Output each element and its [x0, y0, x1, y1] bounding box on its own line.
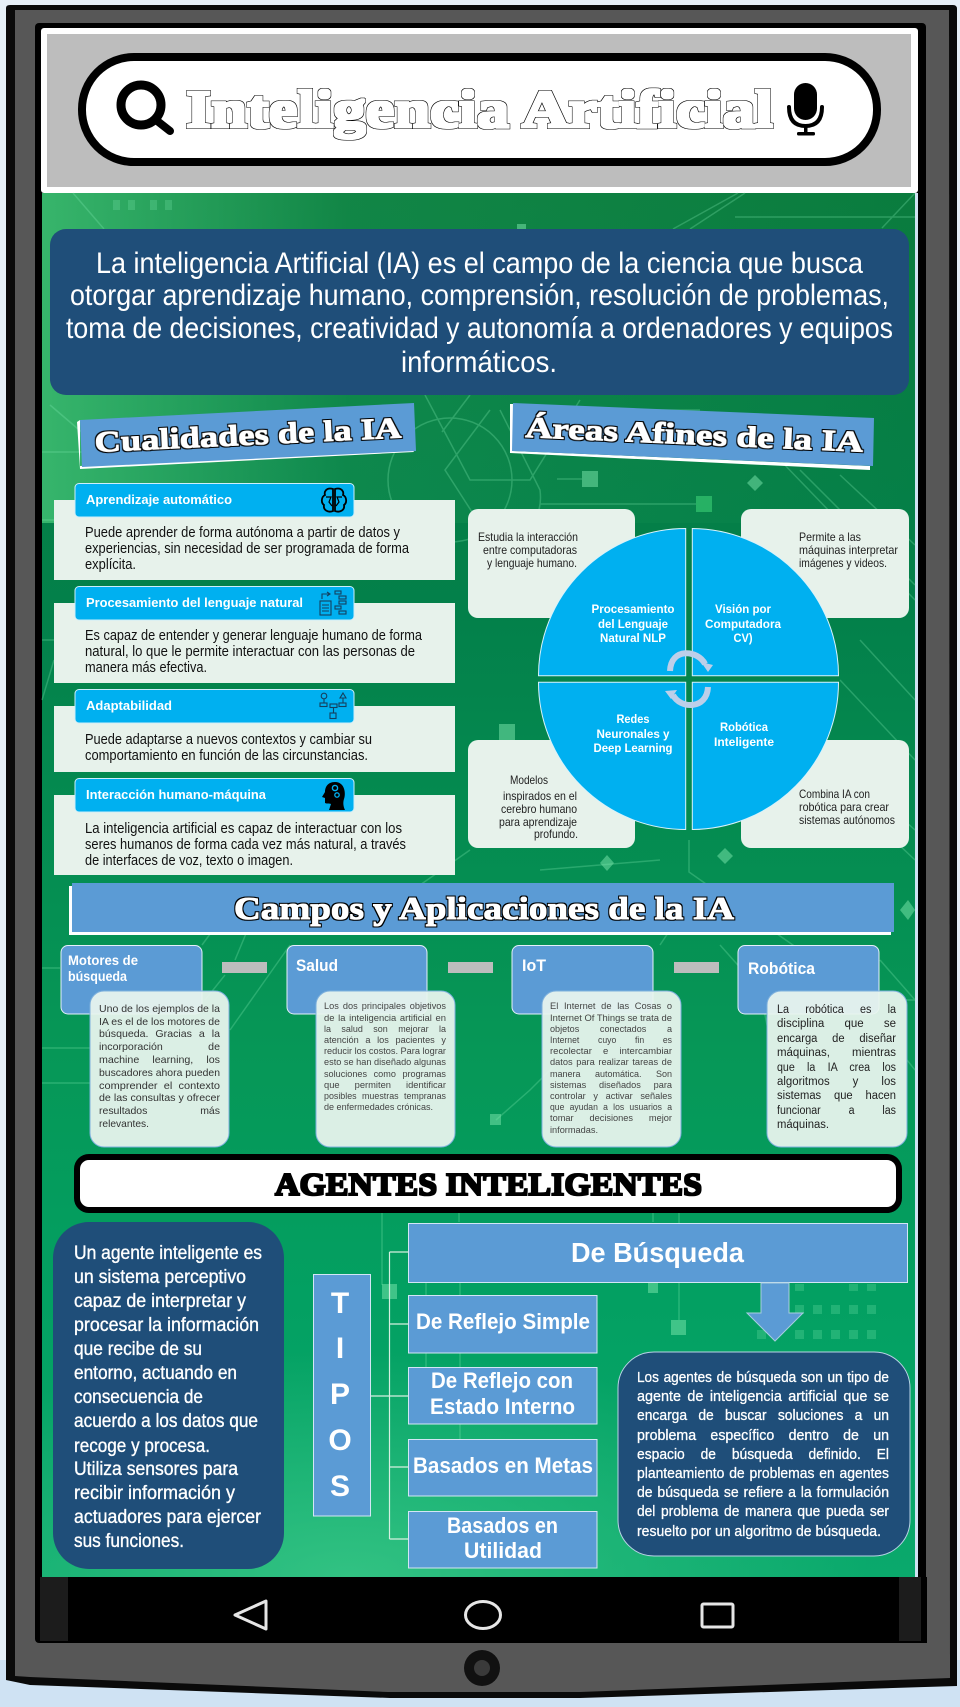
text block: agente inteligente: consecuencia de [74, 1387, 203, 1408]
type: De Búsqueda [408, 1224, 908, 1282]
text block: agentes de búsqueda [618, 1352, 910, 1556]
card: redes: Modelos [510, 773, 548, 787]
type: De Reflejo con Estado Interno [408, 1368, 597, 1424]
intro text block [50, 229, 909, 395]
type: De Reflejo Simple: De Reflejo Simple [416, 1309, 590, 1334]
panel: Motores de búsqueda: IA es el de los motores de [99, 1016, 220, 1028]
quadrant labels: Redes [616, 714, 650, 726]
panel: Aprendizaje automático [54, 484, 455, 580]
panel: IoT: objetos conectados a [550, 1024, 672, 1034]
panel: Salud: soluciones como programas [324, 1069, 446, 1079]
phone camera [464, 1650, 500, 1686]
panel: Motores de búsqueda: buscadores ahora pueden [99, 1067, 220, 1079]
icon: head with gears [322, 782, 345, 810]
panel: Adaptabilidad [54, 690, 455, 772]
card: NLP [468, 509, 635, 618]
card: visión: máquinas interpretar [799, 543, 898, 557]
text block: agente inteligente: Utiliza sensores para [74, 1459, 238, 1480]
icon: flow document [320, 591, 346, 615]
search bar [82, 57, 877, 162]
type: Basados en Utilidad: Basados en [447, 1513, 558, 1538]
text block: agentes de búsqueda: problema específico dentro de un [637, 1427, 889, 1444]
phone navigation bar [40, 1577, 927, 1643]
panel: Salud [287, 946, 455, 1147]
text block: agente inteligente: acuerdo a los datos que [74, 1411, 258, 1432]
intro text block: informáticos. [401, 346, 557, 379]
text block: agente inteligente: un sistema perceptivo [74, 1267, 246, 1288]
diagram: TIPOS: T [331, 1287, 349, 1320]
panel: Salud: la salud son mejorar la [324, 1024, 446, 1034]
icon: back [235, 1601, 266, 1629]
quadrant labels: Natural NLP [600, 633, 666, 645]
panel: Salud: esto se han diseñado algunas [324, 1057, 447, 1067]
icon: recent apps [702, 1604, 733, 1627]
tree connector lines [371, 1252, 408, 1539]
text block: agente inteligente: que recibe de su [74, 1339, 202, 1360]
panel: Salud: de la inteligencia artificial en [324, 1013, 446, 1023]
quadrant labels: Computadora [705, 619, 782, 631]
intro text block: La inteligencia Artificial (IA) es el campo de la ciencia que busca [96, 247, 863, 280]
diagram: TIPOS: O [328, 1424, 352, 1457]
quadrant labels: Procesamiento [592, 604, 674, 616]
icon: cycle arrows [665, 653, 713, 705]
arrow: búsqueda to description [747, 1283, 803, 1341]
panel: Robótica [738, 946, 907, 1147]
quadrant labels [592, 604, 782, 755]
heading: Áreas Afines de la IA: Áreas Afines de la IA [525, 411, 864, 459]
panel: Robótica: que la IA crea los [777, 1062, 896, 1074]
text block: agente inteligente: procesar la información [74, 1315, 259, 1336]
text block: agentes de búsqueda: Los agentes de búsqueda son un tipo de [637, 1369, 889, 1386]
panel: Procesamiento del lenguaje natural: natural, lo que le permite interactuar con las personas de [85, 643, 415, 660]
panel: Motores de búsqueda [61, 946, 229, 1147]
title: Inteligencia Artificial [186, 81, 773, 139]
text block: agente inteligente: actuadores para ejercer [74, 1507, 262, 1528]
panel: Salud: reducir los costos. Para lograr [324, 1046, 446, 1056]
panel: IoT: que ayudan a los usuarios a [550, 1102, 672, 1112]
card: visión: imágenes y videos. [799, 556, 887, 570]
panel: Adaptabilidad: Puede adaptarse a nuevos contextos y cambiar su [85, 731, 372, 748]
card: robótica: robótica para crear [799, 800, 889, 814]
panel: Robótica: disciplina que se [777, 1018, 896, 1030]
panel: Motores de búsqueda: de las consultas y ofrecer [99, 1092, 221, 1104]
panel: Salud: que permiten identificar [324, 1080, 446, 1090]
heading: Campos y Aplicaciones de la IA [69, 883, 894, 935]
panel: Robótica: funcionar a las [777, 1105, 896, 1117]
panel: Procesamiento del lenguaje natural: manera más efectiva. [85, 659, 207, 676]
panel: Interacción humano-máquina: de interfaces de voz, texto o imagen. [85, 852, 293, 869]
panel: Motores de búsqueda: Motores de [68, 953, 138, 968]
card: robótica [741, 740, 909, 848]
panel: IoT: datos para realizar tareas de [550, 1057, 672, 1067]
panel: IoT: sistemas diseñados para [550, 1080, 672, 1090]
type: Basados en Utilidad: Utilidad [464, 1538, 542, 1563]
panel: Procesamiento del lenguaje natural: Es capaz de entender y generar lenguaje humano de forma [85, 627, 423, 644]
panel: Adaptabilidad: Adaptabilidad [86, 698, 172, 713]
type: De Reflejo Simple [408, 1296, 597, 1353]
text block: agentes de búsqueda: encarga de buscar soluciones a un [637, 1407, 889, 1424]
panel: IoT: IoT [522, 956, 547, 975]
text block: agentes de búsqueda: de búsqueda se refiere a la formulación [637, 1484, 889, 1501]
panel: Salud: de enfermedades crónicas. [324, 1102, 433, 1112]
panel: Interacción humano-máquina: seres humanos de forma cada vez más natural, a través [85, 836, 406, 853]
text block: agente inteligente: entorno, actuando en [74, 1363, 237, 1384]
type: Basados en Metas [408, 1440, 597, 1496]
quadrant labels: Visión por [715, 604, 772, 616]
diagram: TIPOS: S [330, 1470, 350, 1503]
panel: Interacción humano-máquina [54, 778, 455, 875]
quadrant segments [538, 528, 839, 830]
heading: Cualidades de la IA: Cualidades de la IA [94, 412, 402, 459]
panel: Robótica: máquinas, mientras [777, 1047, 896, 1059]
heading: Agentes Inteligentes: AGENTES INTELIGENTES [275, 1166, 702, 1202]
text block: agente inteligente: recoge y procesa. [74, 1436, 210, 1457]
panel: Interacción humano-máquina: La inteligencia artificial es capaz de interactuar con los [85, 820, 402, 837]
panel: Procesamiento del lenguaje natural: Procesamiento del lenguaje natural [86, 595, 303, 610]
card: visión [741, 509, 909, 618]
panel: Robótica: máquinas. [777, 1119, 829, 1131]
connectors [222, 962, 719, 973]
icon: magnifier [121, 85, 170, 131]
panel: Procesamiento del lenguaje natural [54, 586, 455, 683]
quadrant labels: Inteligente [714, 737, 774, 749]
diagram: TIPOS: I [336, 1332, 344, 1365]
panel: IoT: Internet Of Things se trata de [550, 1013, 672, 1023]
panel: Motores de búsqueda: búsqueda [68, 969, 127, 984]
heading: Agentes Inteligentes [77, 1157, 899, 1210]
panel: Motores de búsqueda: Uno de los ejemplos de la [99, 1003, 220, 1015]
heading: Áreas Afines de la IA [510, 403, 874, 470]
card: redes: cerebro humano [501, 802, 577, 816]
card: redes: profundo. [534, 827, 578, 841]
panel: Robótica: Robótica [748, 959, 815, 978]
heading: Campos y Aplicaciones de la IA: Campos y Aplicaciones de la IA [234, 890, 734, 926]
panel: Motores de búsqueda: relevantes. [99, 1118, 149, 1130]
panel: IoT [512, 946, 681, 1147]
chart: áreas afines cycle [468, 509, 909, 848]
panel: IoT: controlar y activar señales [550, 1091, 673, 1101]
text block: agente inteligente: capaz de interpretar y [74, 1291, 246, 1312]
quadrant labels: Robótica [720, 722, 769, 734]
card: robótica: sistemas autónomos [799, 813, 895, 827]
panel: Interacción humano-máquina: Interacción humano-máquina [86, 787, 267, 802]
icon: process diagram [320, 693, 346, 718]
panel: Motores de búsqueda: resultados más [99, 1105, 220, 1117]
type: Basados en Metas: Basados en Metas [413, 1453, 593, 1478]
type: De Búsqueda: De Búsqueda [571, 1237, 744, 1268]
card: NLP: entre computadoras [483, 543, 577, 557]
icon: microphone [789, 83, 822, 136]
text block: agentes de búsqueda: agente de inteligencia artificial que se [637, 1388, 889, 1405]
quadrant labels: del Lenguaje [598, 619, 668, 631]
panel: Robótica: encarga de diseñar [777, 1033, 896, 1045]
text block: agentes de búsqueda: del problema de manera que pueda ser [637, 1503, 889, 1520]
panel: IoT: informadas. [550, 1125, 598, 1135]
icon: home [466, 1602, 500, 1628]
text block: agente inteligente [53, 1222, 284, 1569]
panel: Aprendizaje automático: explícita. [85, 556, 136, 573]
type: Basados en Utilidad [408, 1512, 597, 1568]
panel: Aprendizaje automático: Aprendizaje automático [86, 492, 232, 507]
panel: Salud: posibles muestras tempranas [324, 1091, 446, 1101]
panel: Motores de búsqueda: búsqueda. Gracias a la [99, 1028, 220, 1040]
card: NLP: y lenguaje humano. [487, 556, 577, 570]
panel: Aprendizaje automático: experiencias, sin necesidad de ser programada de forma [85, 540, 410, 557]
panel: Motores de búsqueda: machine learning, los [99, 1054, 220, 1066]
diagram: TIPOS: P [330, 1378, 350, 1411]
panel: Salud: Salud [296, 956, 338, 975]
card: redes: para aprendizaje [499, 815, 577, 829]
type: De Reflejo con Estado Interno: Estado Interno [430, 1394, 575, 1419]
text block: agentes de búsqueda: resuelto por un algoritmo de búsqueda. [637, 1523, 881, 1540]
panel: Salud: atención a los pacientes y [324, 1035, 446, 1045]
icon: brain [322, 489, 346, 512]
screen background with circuit pattern [42, 193, 915, 1577]
card: visión: Permite a las [799, 530, 861, 544]
card: redes: inspirados en el [503, 789, 577, 803]
text block: agente inteligente: Un agente inteligente es [74, 1243, 262, 1264]
text block: agente inteligente: recibir información y [74, 1483, 235, 1504]
panel: IoT: recolectar e intercambiar [550, 1046, 672, 1056]
panel: Motores de búsqueda: comprender el contexto [99, 1080, 220, 1092]
heading: Cualidades de la IA [77, 403, 416, 469]
panel: Aprendizaje automático: Puede aprender de forma autónoma a partir de datos y [85, 524, 400, 541]
panel: Adaptabilidad: comportamiento en función de las circunstancias. [85, 747, 368, 764]
panel: IoT: Internet cuyo fin es [550, 1035, 672, 1045]
text block: agentes de búsqueda: planteamiento de problemas en agentes [637, 1465, 889, 1482]
panel: IoT: tomar decisiones mejor [550, 1113, 672, 1123]
card: redes [468, 740, 635, 848]
text block: agentes de búsqueda: espacio de búsqueda definido. El [637, 1446, 889, 1463]
panel: Salud: Los dos principales objetivos [324, 1001, 446, 1011]
quadrant labels: Deep Learning [594, 743, 672, 755]
card: NLP: Estudia la interacción [478, 530, 578, 544]
quadrant labels: Neuronales y [596, 729, 670, 741]
panel: Robótica: algoritmos y los [777, 1076, 896, 1088]
type: De Reflejo con Estado Interno: De Reflejo con [431, 1368, 573, 1393]
panel: Robótica: La robótica es la [777, 1004, 897, 1016]
diagram: TIPOS [314, 1274, 370, 1516]
panel: Robótica: sistemas que hacen [777, 1090, 896, 1102]
text block: agente inteligente: sus funciones. [74, 1531, 184, 1552]
panel: IoT: manera automática. Son [550, 1069, 672, 1079]
panel: Motores de búsqueda: incorporación de [99, 1041, 220, 1053]
header band [47, 34, 911, 187]
intro text block: otorgar aprendizaje humano, comprensión, resolución de problemas, [70, 279, 889, 312]
panel: IoT: El Internet de las Cosas o [550, 1001, 672, 1011]
card: robótica: Combina IA con [799, 787, 870, 801]
quadrant labels: CV) [734, 633, 753, 645]
